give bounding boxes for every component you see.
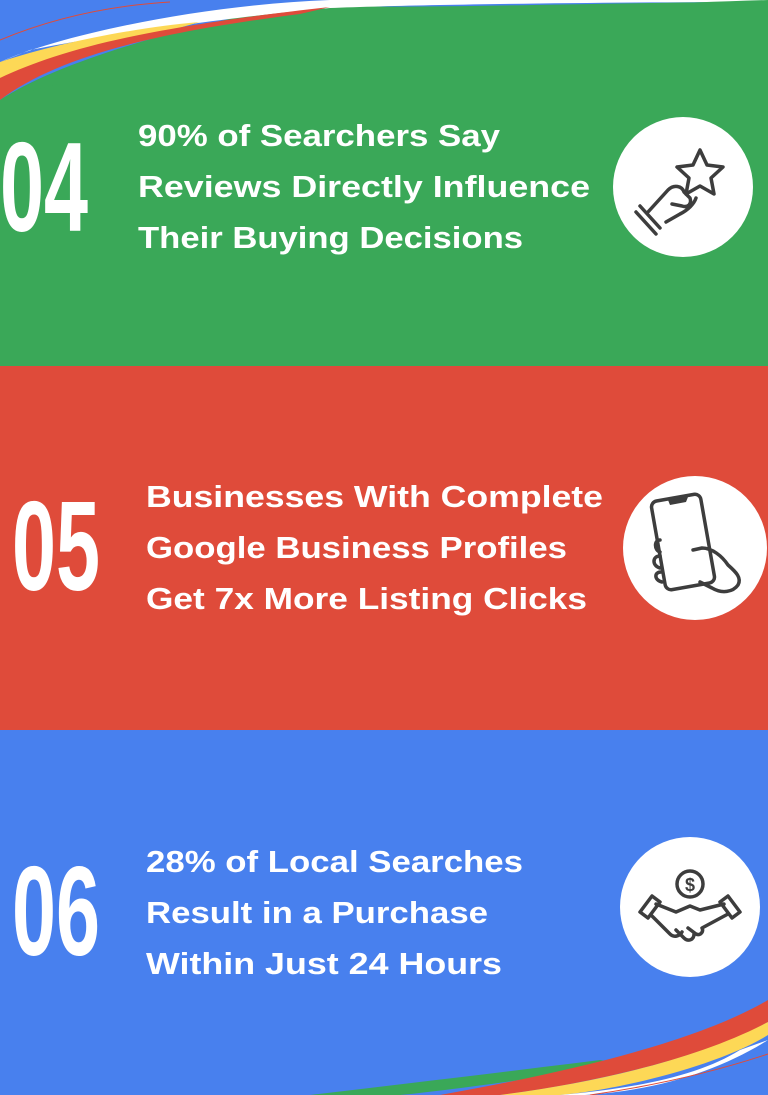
text block 04: Reviews Directly Influence bbox=[138, 169, 590, 204]
text block 05: Businesses With Complete bbox=[146, 479, 603, 514]
icon: handshake with dollar bbox=[620, 837, 760, 977]
text block 04: 90% of Searchers Say bbox=[138, 118, 501, 153]
text block 06: Result in a Purchase bbox=[146, 895, 488, 930]
panel: blue section 06 bbox=[0, 730, 768, 1095]
number 06: 06 bbox=[12, 840, 100, 982]
number 04: 04 bbox=[0, 116, 88, 258]
top decorative swoosh bbox=[0, 0, 768, 100]
text block 05: Google Business Profiles bbox=[146, 530, 567, 565]
text block 06: Within Just 24 Hours bbox=[146, 946, 502, 981]
panel: red section 05 bbox=[0, 366, 768, 730]
text block 05: Get 7x More Listing Clicks bbox=[146, 581, 587, 616]
text block 06 bbox=[146, 844, 523, 981]
bottom decorative swoosh bbox=[310, 1000, 768, 1095]
text block 04: Their Buying Decisions bbox=[138, 220, 523, 255]
icon: handshake with dollar: $ bbox=[685, 875, 695, 895]
text block 05 bbox=[146, 479, 603, 616]
icon: hand holding phone bbox=[623, 476, 767, 620]
text block 06: 28% of Local Searches bbox=[146, 844, 523, 879]
panel: green section 04 bbox=[0, 0, 768, 366]
icon: hand holding star bbox=[613, 117, 753, 257]
number 05: 05 bbox=[12, 475, 100, 617]
text block 04 bbox=[138, 118, 590, 255]
